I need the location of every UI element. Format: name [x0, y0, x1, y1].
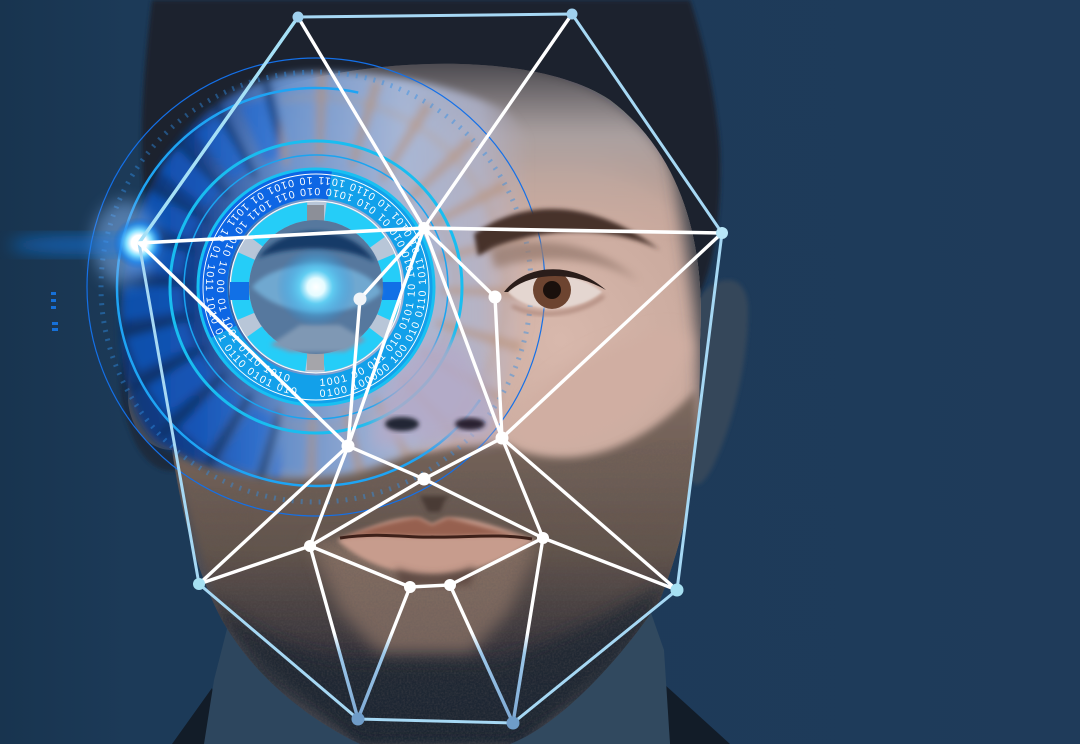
face mesh wireframe — [139, 14, 722, 723]
ear: right — [688, 280, 748, 485]
hairline — [552, 76, 672, 176]
forehead shading — [338, 64, 684, 202]
right face edge shade — [664, 160, 701, 434]
mesh nodes — [193, 8, 728, 730]
hair — [142, 0, 720, 320]
eye interior — [249, 220, 383, 354]
HUD outer arcs — [87, 58, 545, 516]
right eye and eyebrow — [474, 209, 660, 314]
ear: left — [120, 340, 178, 471]
cheek light under right — [515, 331, 690, 446]
HUD radial spokes, right side — [274, 69, 524, 481]
suit and shirt — [172, 610, 730, 744]
beard — [170, 390, 700, 744]
nose — [372, 340, 496, 447]
HUD gradient wash — [118, 66, 517, 484]
beard stubble texture — [220, 558, 660, 744]
binary text ring, outer row: 0100 100000 100 010 0110 1011 01 0101 10 0110 1011 10 0101 01 1011 10 01 1011 1010 01 0110 0101 010 — [206, 177, 426, 397]
mouth — [337, 496, 535, 585]
lower lip chin patch — [310, 540, 540, 655]
eye glow — [276, 247, 356, 327]
main illustration: facial recognition portrait — [0, 0, 749, 744]
binary text ring, inner row: 1001 00 011 010 0101 10 1010 010 01 010 1010 010 011 1011 10 010 10 00 01 1001 0110 1010 — [216, 188, 416, 386]
HUD eye target — [196, 168, 436, 406]
HUD blocks, left side — [118, 76, 284, 480]
ring band — [213, 184, 419, 390]
face skin — [128, 64, 701, 744]
chin dark bottom — [210, 580, 670, 744]
flare on left mesh node — [10, 201, 165, 285]
cyan segment ring — [230, 201, 402, 373]
HUD blue zone on left side of face — [86, 57, 545, 517]
small dashed marks — [51, 292, 58, 331]
